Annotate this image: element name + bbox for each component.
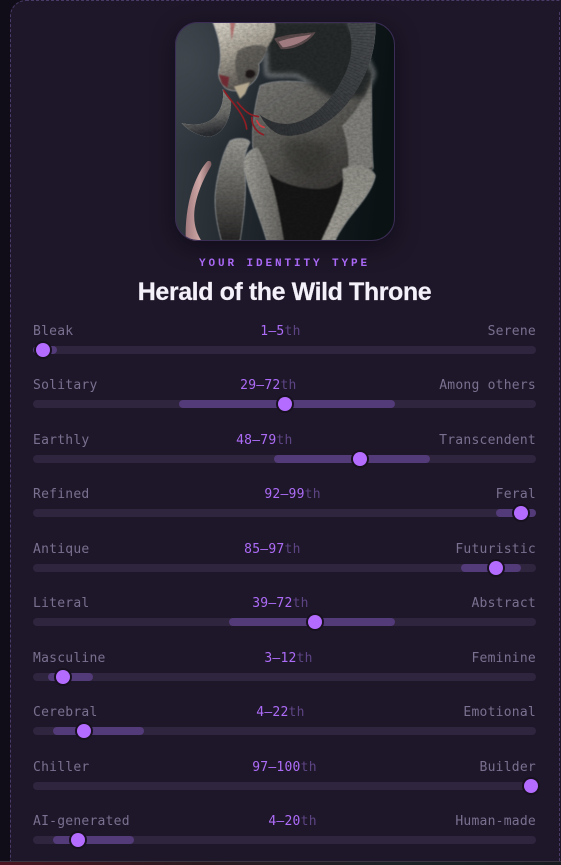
slider: Literal to Abstract: Abstract bbox=[471, 596, 536, 611]
slider: AI-generated to Human-made: 4–20th bbox=[268, 814, 317, 829]
slider: Bleak to Serene: 1–5th bbox=[260, 324, 301, 339]
chest bbox=[253, 69, 373, 189]
slider: Antique to Futuristic bbox=[33, 542, 536, 577]
slider: Bleak to Serene bbox=[33, 324, 536, 359]
slider: Literal to Abstract bbox=[33, 596, 536, 631]
slider: Earthly to Transcendent: Earthly bbox=[33, 433, 89, 448]
slider: Literal to Abstract: 39–72th bbox=[252, 596, 309, 611]
creature portrait bbox=[175, 22, 395, 241]
ear inner bbox=[278, 34, 312, 47]
slider: Masculine to Feminine bbox=[33, 651, 536, 686]
left horn bbox=[182, 89, 231, 137]
slider: Masculine to Feminine: Feminine bbox=[471, 651, 536, 666]
slider: AI-generated to Human-made: AI-generated bbox=[33, 814, 130, 829]
head bbox=[213, 22, 275, 91]
slider: Solitary to Among others: 29–72th bbox=[240, 378, 297, 393]
slider: Refined to Feral: Refined bbox=[33, 487, 89, 502]
front left leg bbox=[244, 147, 284, 241]
slider: Cerebral to Emotional: Cerebral bbox=[33, 705, 98, 720]
eyebrow label: YOUR IDENTITY TYPE bbox=[199, 258, 370, 270]
creature body bbox=[182, 19, 376, 244]
slider: Earthly to Transcendent bbox=[33, 433, 536, 468]
slider: AI-generated to Human-made: Human-made bbox=[455, 814, 536, 829]
mouth tendrils bbox=[224, 91, 264, 135]
slider: Literal to Abstract: Literal bbox=[33, 596, 89, 611]
right horn bbox=[260, 22, 376, 136]
title: Herald of the Wild Throne bbox=[138, 278, 431, 306]
slider: Chiller to Builder bbox=[33, 760, 540, 795]
slider: Solitary to Among others: Solitary bbox=[33, 378, 98, 393]
tail bbox=[186, 161, 211, 241]
slider: Refined to Feral bbox=[33, 487, 536, 522]
slider: Solitary to Among others bbox=[33, 378, 536, 413]
slider: Masculine to Feminine: Masculine bbox=[33, 651, 106, 666]
eye and mouth bbox=[219, 22, 255, 99]
slider: Chiller to Builder: Chiller bbox=[33, 760, 89, 775]
front right leg bbox=[321, 166, 375, 241]
rear leg bbox=[215, 138, 250, 241]
slider: Masculine to Feminine: 3–12th bbox=[264, 651, 313, 666]
slider: Solitary to Among others: Among others bbox=[439, 378, 536, 393]
ear bbox=[274, 32, 316, 49]
slider: AI-generated to Human-made bbox=[33, 814, 536, 849]
shoulder shadow bbox=[263, 19, 374, 97]
slider: Cerebral to Emotional bbox=[33, 705, 536, 740]
slider: Cerebral to Emotional: Emotional bbox=[463, 705, 536, 720]
belly shadow bbox=[265, 164, 350, 244]
slider: Antique to Futuristic: Futuristic bbox=[455, 542, 536, 557]
slider: Chiller to Builder: 97–100th bbox=[252, 760, 317, 775]
slider: Refined to Feral: 92–99th bbox=[264, 487, 321, 502]
slider: Bleak to Serene: Serene bbox=[488, 324, 536, 339]
slider: Cerebral to Emotional: 4–22th bbox=[256, 705, 305, 720]
slider: Bleak to Serene: Bleak bbox=[33, 324, 73, 339]
slider: Refined to Feral: Feral bbox=[496, 487, 536, 502]
slider: Antique to Futuristic: Antique bbox=[33, 542, 89, 557]
slider: Chiller to Builder: Builder bbox=[480, 760, 536, 775]
slider: Earthly to Transcendent: Transcendent bbox=[439, 433, 536, 448]
slider: Earthly to Transcendent: 48–79th bbox=[236, 433, 293, 448]
slider: Antique to Futuristic: 85–97th bbox=[244, 542, 301, 557]
